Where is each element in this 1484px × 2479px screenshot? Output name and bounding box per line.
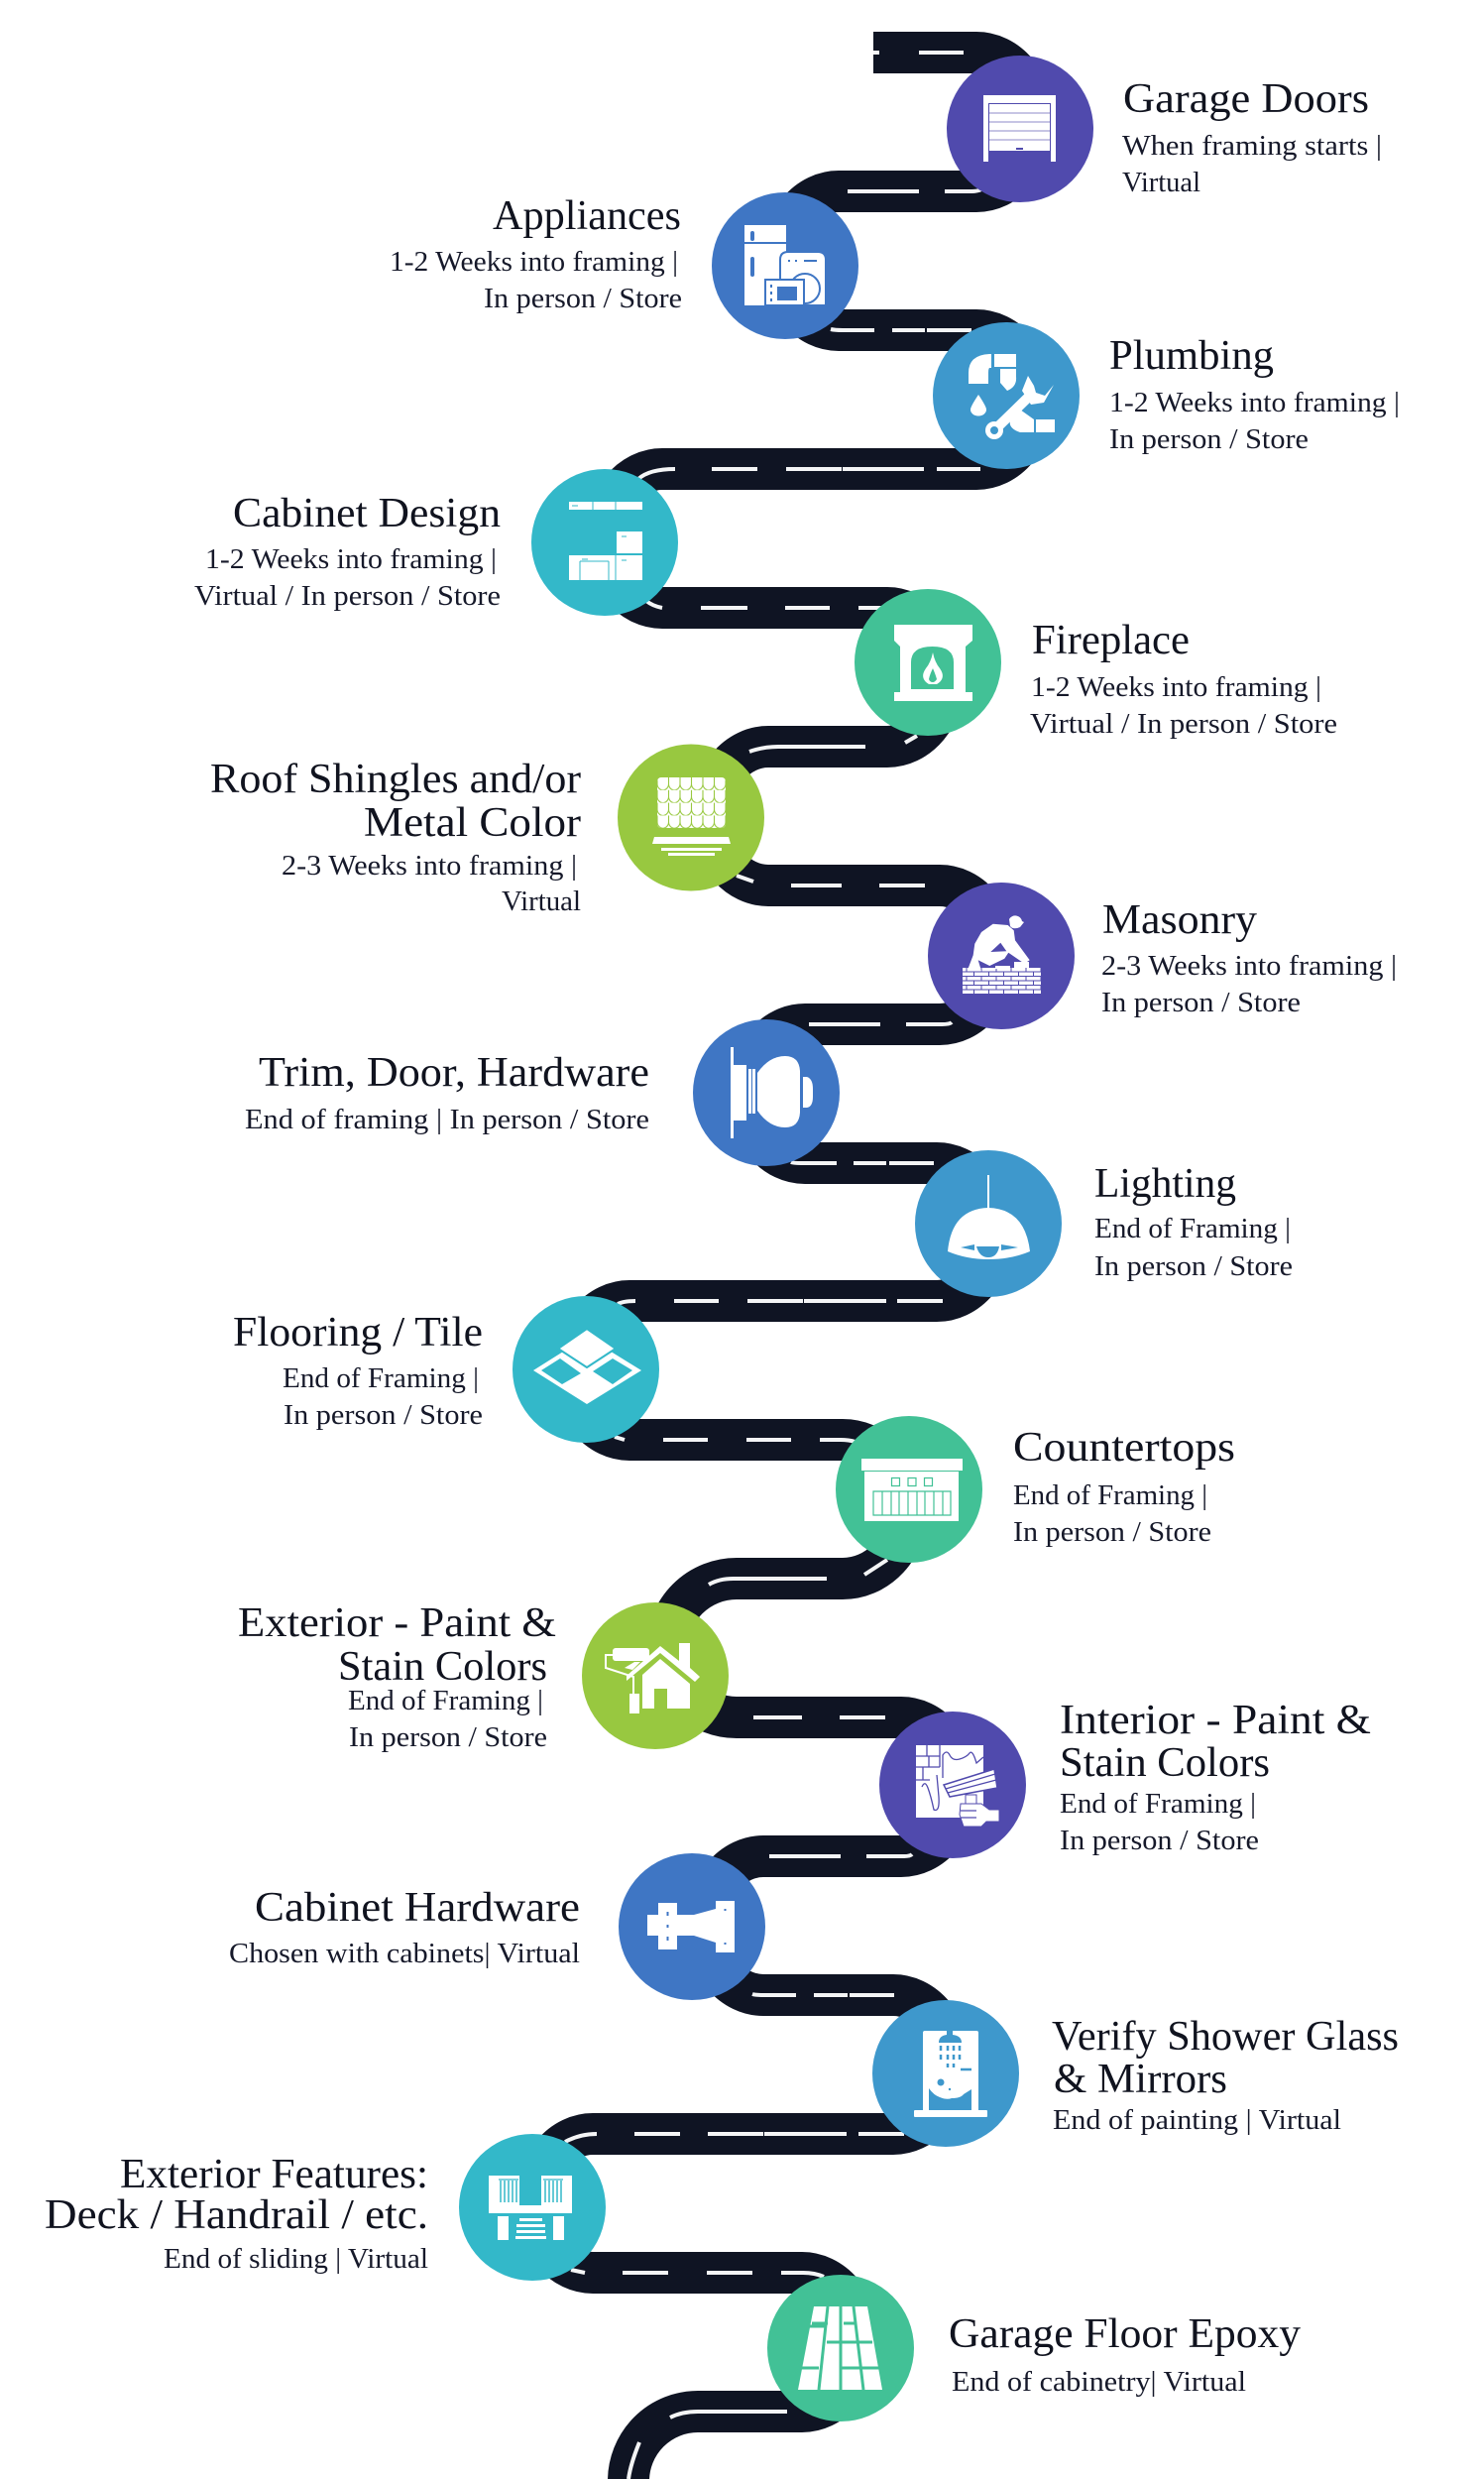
stop: Trim, Door, Hardware [245,1019,840,1166]
icon: deck with handrail [489,2176,572,2240]
icon: paint roller and house [606,1643,700,1713]
details [283,1362,483,1431]
heading: Roof Shingles and/or [210,757,581,802]
circle: green [767,2275,914,2421]
icon: bricklayer on wall [963,915,1041,994]
road centre dashes [565,53,981,2479]
text: Fireplace [1030,618,1337,740]
heading: Cabinet Hardware [255,1885,580,1931]
heading: Cabinet Design [233,491,501,536]
heading: Exterior Features: [120,2152,428,2197]
details: 1-2 Weeks into framing | [1109,387,1400,418]
heading [238,1600,556,1690]
icon: fireplace [894,625,972,701]
details [194,543,501,612]
heading: Exterior - Paint & [238,1600,556,1646]
heading: Flooring / Tile [233,1310,483,1356]
details: End of framing | In person / Store [245,1104,649,1135]
details: In person / Store [1060,1825,1259,1856]
text: Verify Shower Glass [1052,2014,1399,2136]
heading [210,757,581,846]
details: In person / Store [1094,1250,1293,1282]
details: Chosen with cabinets| Virtual [229,1938,580,1969]
text: Appliances [390,193,682,314]
details [348,1685,547,1753]
details: 2-3 Weeks into framing | [1101,950,1397,982]
details: In person / Store [1101,987,1301,1018]
heading: Garage Floor Epoxy [949,2311,1301,2357]
icon: garage door [983,95,1056,162]
details: Virtual / In person / Store [1030,708,1337,740]
heading: Countertops [1013,1425,1235,1471]
details: End of Framing | [348,1685,543,1716]
details: In person / Store [284,1399,483,1431]
stop: Interior Paint and Stain Colors [879,1698,1371,1858]
circle: teal [459,2134,606,2281]
details: In person / Store [1109,423,1309,455]
details [390,246,682,314]
text: Trim, Door, Hardware [245,1050,649,1135]
circle: purple [947,56,1093,202]
heading: Garage Doors [1123,76,1369,122]
circle: purple [928,883,1075,1029]
text: Countertops [1013,1425,1235,1548]
circle: lime [618,744,764,890]
heading: Trim, Door, Hardware [259,1050,649,1096]
text: Cabinet Design [194,491,501,612]
heading: Appliances [493,193,681,239]
text: Exterior Paint [238,1600,556,1753]
heading [45,2152,428,2238]
icon: cabinet hinge [647,1901,735,1952]
heading [1060,1698,1371,1786]
circle: teal [513,1296,659,1443]
circle: green [836,1416,982,1563]
circle: blue [712,192,858,339]
stop: Exterior Paint and Stain Colors [238,1600,729,1753]
stop: Verify Shower Glass and Mirrors [872,2000,1399,2147]
text: Flooring / Tile [233,1310,483,1431]
stop: Masonry [928,883,1397,1029]
details: End of painting | Virtual [1053,2104,1341,2136]
details [1109,387,1400,455]
details: 1-2 Weeks into framing | [205,543,497,575]
details: In person / Store [484,283,682,314]
heading: Interior - Paint & [1060,1698,1371,1743]
heading: Masonry [1102,897,1257,943]
text: Cabinet Hardware [229,1885,580,1969]
details [1060,1788,1259,1856]
details: End of cabinetry| Virtual [952,2366,1246,2398]
text: Plumbing [1109,333,1400,455]
icon: appliances [744,225,826,305]
stop: Lighting [915,1150,1293,1297]
text: Roof Shingles [210,757,581,917]
text: Interior Paint [1060,1698,1371,1856]
icon: pendant lamp [948,1175,1030,1259]
heading: Verify Shower Glass [1052,2014,1399,2060]
stop: Garage Doors [947,56,1382,202]
circle: sky blue [933,322,1080,469]
details: In person / Store [1013,1516,1211,1548]
circle: green [855,589,1001,736]
details [1013,1479,1211,1548]
details [282,850,581,917]
stop: Cabinet Hardware [229,1853,765,2000]
heading: Stain Colors [1060,1740,1270,1786]
road: winding asphalt path [535,53,1034,2479]
heading [1052,2014,1399,2102]
text: Masonry [1101,897,1397,1018]
stop: Appliances [390,192,858,339]
circle: sky blue [872,2000,1019,2147]
details: 1-2 Weeks into framing | [390,246,678,278]
road surface [535,53,1034,2479]
details: 2-3 Weeks into framing | [282,850,577,882]
icon: shower [914,2031,987,2117]
text: Garage Doors [1122,76,1382,198]
details: End of Framing | [1094,1213,1291,1244]
stop: Countertops [836,1416,1235,1563]
details: End of sliding | Virtual [164,2243,428,2275]
icon: door knob [731,1047,813,1138]
circle: purple [879,1712,1026,1858]
stop: Garage Floor Epoxy [767,2275,1301,2421]
icon: counter cabinet [861,1459,963,1521]
details: Virtual / In person / Store [194,580,501,612]
heading: Metal Color [364,800,581,846]
icon: floor tiles [533,1329,641,1404]
details [1101,950,1397,1018]
details: End of Framing | [1013,1479,1207,1511]
icon: wall plastering trowel [916,1745,999,1827]
stop: Roof Shingles and/or Metal Color [210,744,764,917]
details: 1-2 Weeks into framing | [1031,671,1321,703]
heading: Stain Colors [338,1644,547,1690]
details [1122,130,1382,198]
stop: Flooring / Tile [233,1296,659,1443]
stop: Fireplace [855,589,1337,740]
details: Virtual [502,885,581,917]
circle: lime [582,1602,729,1749]
details: End of Framing | [1060,1788,1256,1820]
text: Lighting [1094,1161,1293,1282]
circle: sky blue [915,1150,1062,1297]
icon: kitchen cabinets [569,502,642,580]
text: Exterior Features [45,2152,428,2275]
details: When framing starts | [1122,130,1382,162]
stop: Exterior Features [45,2134,606,2281]
circle: blue [619,1853,765,2000]
heading: Fireplace [1032,618,1190,663]
stop: Cabinet Design [194,469,678,616]
icon: roof shingles [652,777,731,856]
details: End of Framing | [283,1362,479,1394]
circle: blue [693,1019,840,1166]
details: Virtual [1122,167,1200,198]
icon: plumbing pipes and wrench [969,354,1055,439]
details [1030,671,1337,740]
stop: Plumbing [933,322,1400,469]
details [1094,1213,1293,1282]
icon: floor planks [798,2306,882,2390]
circle: teal [531,469,678,616]
heading: Deck / Handrail / etc. [45,2192,428,2238]
heading: & Mirrors [1054,2057,1227,2102]
heading: Lighting [1094,1161,1236,1207]
heading: Plumbing [1109,333,1274,379]
details: In person / Store [349,1721,547,1753]
text: Garage Floor Epoxy [949,2311,1301,2398]
